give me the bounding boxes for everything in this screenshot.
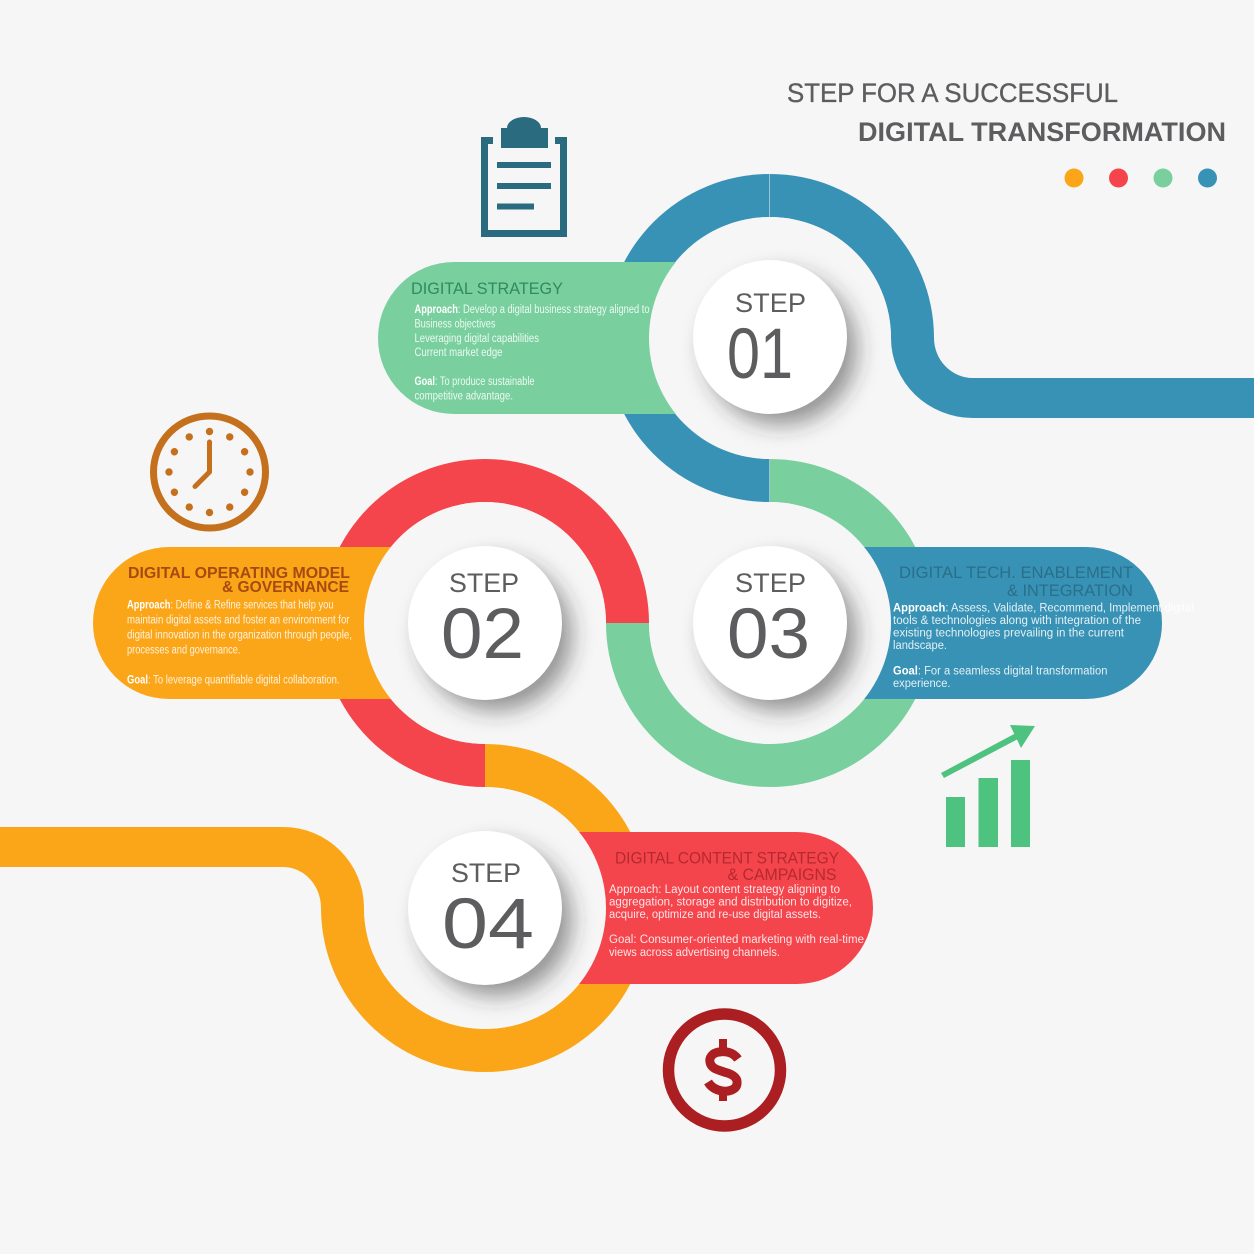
path segment: red (321, 459, 649, 787)
panel: digital strategy: competitive advantage. (414, 390, 513, 402)
path segment: orange (0, 744, 649, 1072)
title: DIGITAL TRANSFORMATION (858, 117, 1226, 147)
panel: digital operating model: processes and governance. (127, 644, 240, 656)
panel: digital operating model: Approach: Define & Refine services that help you (127, 600, 334, 612)
path segment: blue (605, 174, 1254, 502)
step 02 badge: 02 (441, 595, 524, 674)
panel: digital operating model: DIGITAL OPERATING MODEL (128, 565, 350, 582)
step 03 badge: STEP (735, 568, 806, 598)
panel: digital tech enablement: experience. (893, 678, 950, 690)
step 02 badge (364, 502, 606, 744)
panel: digital content strategy: aggregation, storage and distribution to digitize, (609, 896, 852, 908)
panel: digital operating model (93, 547, 485, 699)
step 02 badge: STEP (449, 568, 519, 598)
panel: digital content strategy (485, 832, 873, 984)
panel: digital strategy: DIGITAL STRATEGY (411, 279, 563, 298)
panel: digital content strategy: & CAMPAIGNS (728, 865, 836, 884)
panel: digital tech enablement: tools & technologies along with integration of the (893, 615, 1141, 627)
panel: digital tech enablement (770, 547, 1194, 699)
step 03 badge (649, 502, 891, 744)
panel: digital content strategy: Approach: Layout content strategy aligning to (609, 884, 840, 896)
step 04 badge (364, 787, 606, 1029)
panel: digital strategy: Approach: Develop a digital business strategy aligned to (414, 304, 650, 316)
panel: digital tech enablement: Approach: Assess, Validate, Recommend, Implement digital (893, 602, 1194, 614)
panel: digital tech enablement: DIGITAL TECH. ENABLEMENT (899, 563, 1133, 582)
panel: digital strategy (378, 262, 770, 414)
title (787, 78, 1226, 147)
panel: digital tech enablement: & INTEGRATION (1007, 581, 1133, 600)
panel: digital strategy: Business objectives (414, 318, 496, 330)
panel: digital content strategy: acquire, optimize and re-use digital assets. (609, 909, 821, 921)
legend dots (1064, 168, 1217, 188)
icon: clipboard (481, 117, 567, 237)
panel: digital operating model: digital innovation in the organization through people, (127, 630, 352, 642)
step 01 badge (649, 217, 891, 459)
panel: digital strategy: Goal: To produce sustainable (414, 376, 534, 388)
panel: digital content strategy: views across advertising channels. (609, 947, 780, 959)
step 01 badge: 01 (727, 315, 793, 394)
step 03 badge: 03 (727, 595, 810, 674)
panel: digital tech enablement: existing technologies prevailing in the current (893, 628, 1125, 640)
panel: digital strategy: Current market edge (414, 347, 502, 359)
step 04 badge: STEP (451, 858, 521, 888)
step 04 badge: 04 (442, 885, 534, 964)
panel: digital operating model: & GOVERNANCE (222, 579, 349, 596)
icon: dollar coin (668, 1014, 780, 1126)
icon: clock (154, 416, 266, 528)
panel: digital strategy: Leveraging digital capabilities (414, 333, 539, 345)
panel: digital operating model: Goal: To leverage quantifiable digital collaboration. (127, 674, 340, 686)
panel: digital content strategy: DIGITAL CONTENT STRATEGY (615, 848, 839, 868)
path segment: green (606, 459, 934, 787)
panel: digital tech enablement: Goal: For a seamless digital transformation (893, 666, 1108, 678)
title: STEP FOR A SUCCESSFUL (787, 78, 1118, 108)
panel: digital operating model: maintain digital assets and foster an environment for (127, 614, 350, 626)
icon: growth chart (941, 725, 1035, 847)
step 01 badge: STEP (735, 288, 806, 318)
panel: digital tech enablement: landscape. (893, 640, 947, 652)
panel: digital content strategy: Goal: Consumer-oriented marketing with real-time (609, 934, 864, 946)
